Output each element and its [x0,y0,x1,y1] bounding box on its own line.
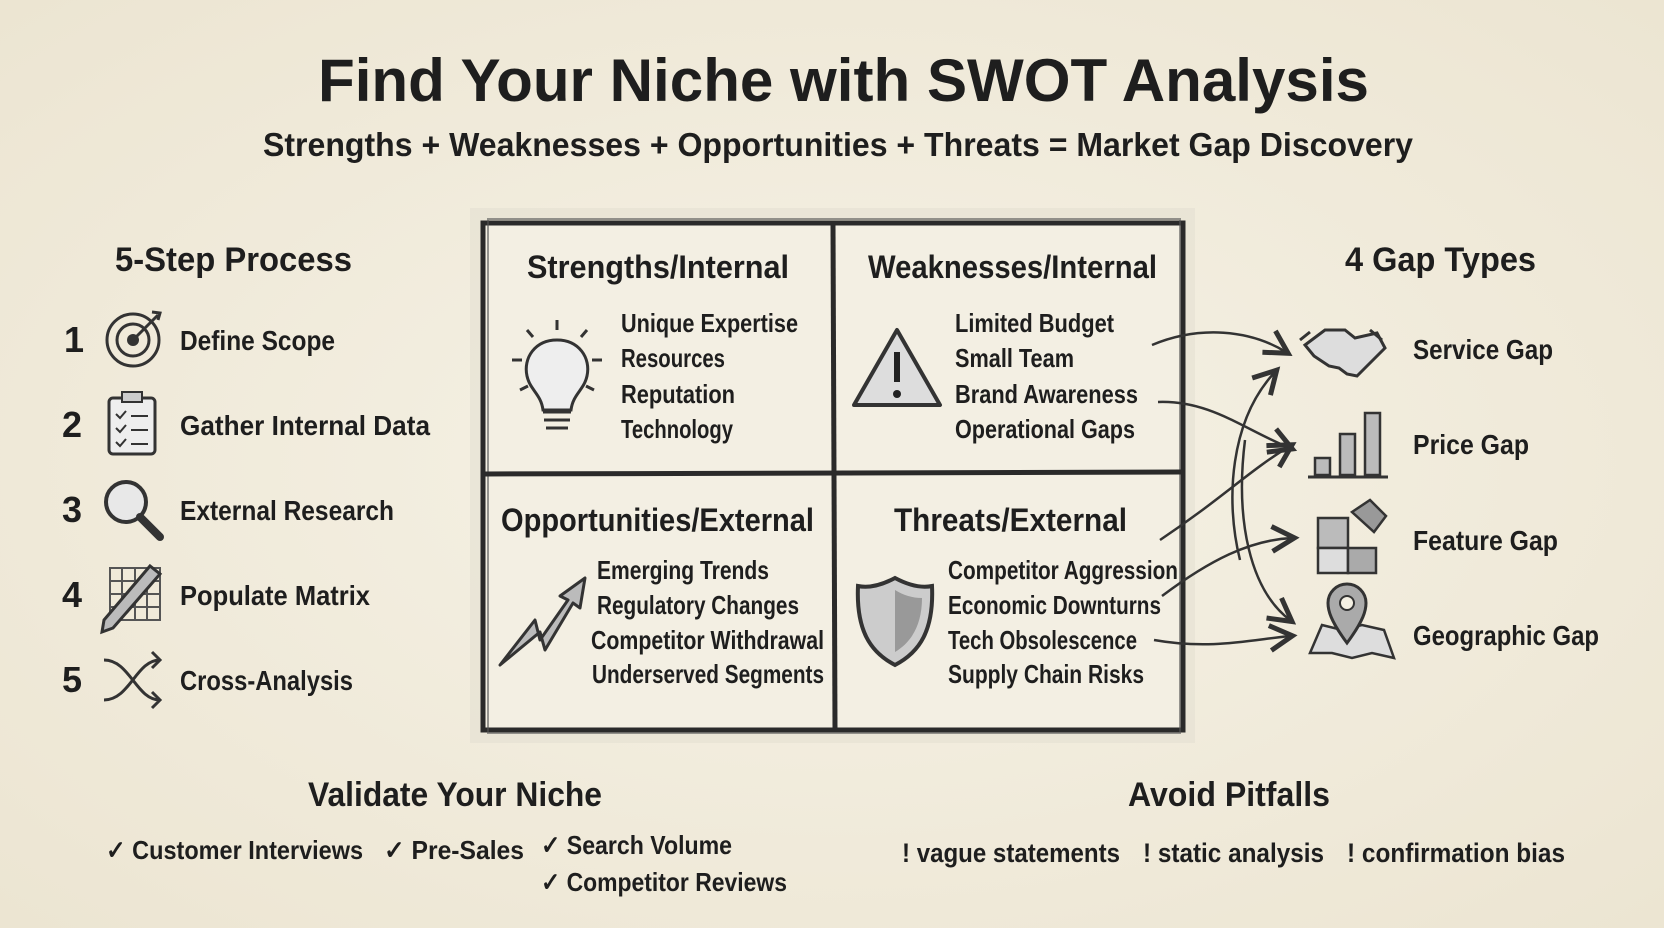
step 1: 1 [64,319,84,360]
step 4 [62,566,370,632]
quadrant: strengths: Strengths/Internal [527,249,789,285]
quadrant: threats: Tech Obsolescence [948,625,1137,655]
icon: rising arrow [500,578,585,665]
gap: geographic: Geographic Gap [1413,620,1599,651]
icon: warning triangle [854,330,940,405]
step 3 [62,482,394,537]
panel: validate your niche: Validate Your Niche [308,776,602,814]
gap: service: Service Gap [1413,334,1553,365]
heading: 5-Step Process: 5-Step Process [115,241,352,279]
quadrant: threats: Economic Downturns [948,590,1161,620]
quadrant: threats: Competitor Aggression [948,555,1178,585]
quadrant: weaknesses: Small Team [955,343,1074,373]
quadrant: opportunities: Regulatory Changes [597,590,799,620]
quadrant: opportunities: Opportunities/External [501,502,814,538]
quadrant: weaknesses [854,249,1157,444]
quadrant: threats [858,502,1178,689]
quadrant: opportunities [500,502,824,689]
gap: geographic [1310,584,1599,658]
gap: service [1300,330,1553,376]
panel: validate your niche: ✓ Customer Interviews [106,835,363,865]
panel: validate your niche: ✓ Competitor Reviews [541,867,787,897]
step 1: Define Scope [180,325,335,356]
step 2 [62,392,430,454]
step 3: 3 [62,489,82,530]
quadrant: threats: Supply Chain Risks [948,659,1144,689]
quadrant: opportunities: Underserved Segments [592,659,824,689]
gap: price [1308,413,1529,477]
quadrant: strengths [512,249,798,444]
panel: 4 gap types [1300,241,1599,658]
quadrant: strengths: Reputation [621,379,735,409]
quadrant: opportunities: Competitor Withdrawal [591,625,824,655]
arrows: matrix to gap types [1152,332,1292,644]
step 3: External Research [180,495,394,526]
quadrant: threats: Threats/External [894,502,1127,538]
panel: avoid pitfalls [902,776,1565,868]
title: Find Your Niche with SWOT Analysis [318,47,1369,114]
quadrant: weaknesses: Brand Awareness [955,379,1138,409]
icon: shield [858,578,932,665]
panel: avoid pitfalls: ! vague statements [902,838,1120,868]
quadrant: weaknesses: Limited Budget [955,308,1114,338]
quadrant: weaknesses: Operational Gaps [955,414,1135,444]
quadrant: opportunities: Emerging Trends [597,555,769,585]
panel: avoid pitfalls: Avoid Pitfalls [1128,776,1330,814]
gap: feature [1318,500,1558,573]
step 5 [62,652,353,708]
panel: validate your niche: ✓ Search Volume [541,830,732,860]
panel: 5-step process [62,241,430,708]
gap: price: Price Gap [1413,429,1529,460]
panel: SWOT matrix [470,208,1195,743]
step 2: 2 [62,404,82,445]
panel: avoid pitfalls: ! static analysis [1143,838,1324,868]
step 4: 4 [62,574,82,615]
panel: avoid pitfalls: ! confirmation bias [1347,838,1565,868]
step 2: Gather Internal Data [180,410,430,441]
quadrant: weaknesses: Weaknesses/Internal [868,249,1157,285]
quadrant: strengths: Unique Expertise [621,308,798,338]
panel: validate your niche: ✓ Pre-Sales [384,835,524,865]
gap: feature: Feature Gap [1413,525,1558,556]
step 5: Cross-Analysis [180,665,353,696]
panel: validate your niche [106,776,787,897]
icon: lightbulb [512,320,602,428]
step 1 [64,312,335,366]
subtitle: Strengths + Weaknesses + Opportunities + Threats = Market Gap Discovery [263,126,1414,163]
heading: 4 Gap Types: 4 Gap Types [1345,241,1536,279]
quadrant: strengths: Technology [621,414,733,444]
quadrant: strengths: Resources [621,343,725,373]
step 5: 5 [62,659,82,700]
step 4: Populate Matrix [180,580,370,611]
